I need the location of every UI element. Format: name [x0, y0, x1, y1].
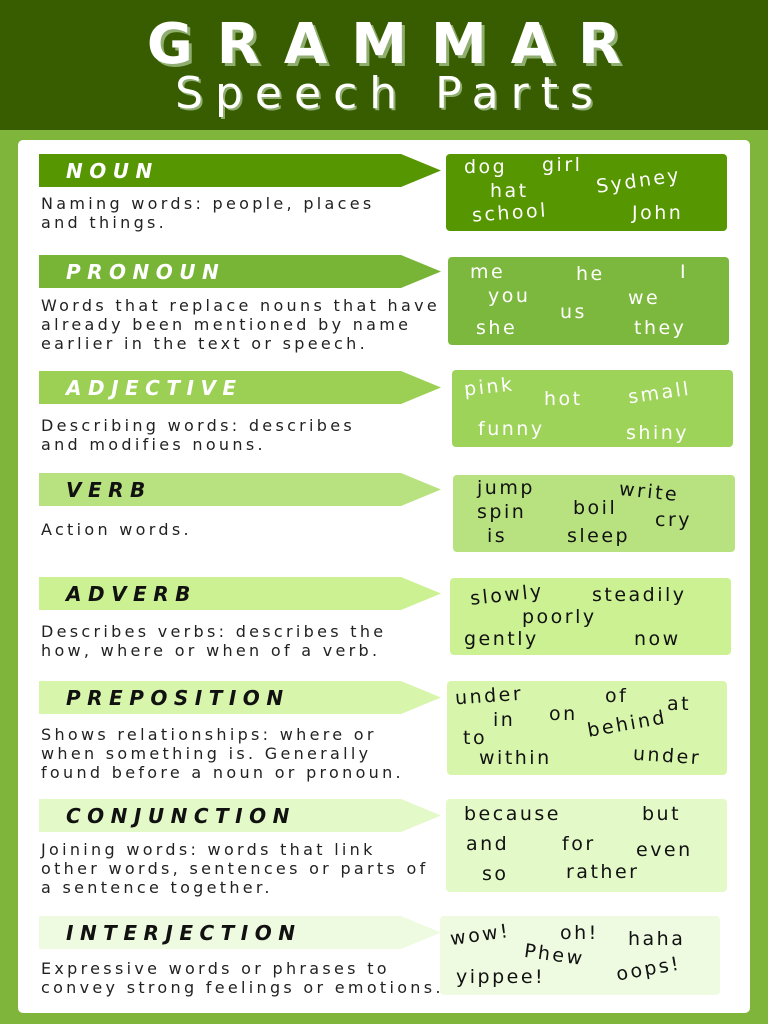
banner: adverb: ADVERB: [66, 582, 197, 606]
box: adverb examples: slowly: [469, 580, 545, 610]
box: interjection examples: wow!: [449, 920, 512, 950]
text: conjunction description: Joining words: words that link: [41, 840, 376, 859]
text: conjunction description: [40, 840, 428, 897]
box: interjection examples: haha: [628, 928, 685, 950]
box: pronoun examples: [448, 257, 729, 345]
banner: preposition: PREPOSITION: [66, 686, 290, 710]
box: verb examples: write: [618, 478, 680, 506]
box: adverb examples: poorly: [522, 606, 597, 628]
banner: noun: NOUN: [66, 159, 159, 183]
box: adverb examples: steadily: [592, 584, 687, 606]
text: preposition description: when something is. Generally: [41, 744, 371, 763]
box: conjunction examples: [446, 799, 727, 892]
text: adverb description: Describes verbs: describes the: [41, 622, 386, 641]
text: noun description: [41, 194, 375, 232]
box: adverb examples: [450, 578, 731, 655]
box: conjunction examples: so: [482, 863, 509, 885]
box: verb examples: cry: [655, 509, 692, 531]
text: interjection description: [41, 959, 444, 997]
box: adjective examples: hot: [544, 388, 583, 410]
box: preposition examples: at: [667, 693, 691, 715]
text: preposition description: Shows relationships: where or: [41, 725, 377, 744]
box: noun examples: John: [632, 202, 683, 224]
banner: conjunction: CONJUNCTION: [66, 804, 296, 828]
box: adverb examples: now: [634, 628, 681, 650]
box: noun examples: girl: [542, 154, 582, 176]
box: pronoun examples: we: [628, 287, 660, 309]
box: adverb examples: gently: [464, 628, 539, 650]
box: noun examples: [446, 154, 727, 231]
text: pronoun description: Words that replace nouns that have: [41, 296, 440, 315]
box: preposition examples: in: [493, 709, 515, 731]
box: verb examples: [453, 475, 735, 552]
banner: adverb: [39, 577, 441, 610]
banner: interjection: INTERJECTION: [66, 921, 302, 945]
box: preposition examples: on: [549, 703, 578, 725]
box: preposition examples: [447, 681, 727, 775]
banner: noun: [39, 154, 441, 187]
text: adverb description: [41, 622, 386, 660]
box: interjection examples: oops!: [615, 952, 683, 986]
box: adjective examples: funny: [478, 418, 545, 440]
box: adjective examples: pink: [463, 373, 515, 401]
banner: adjective: ADJECTIVE: [66, 376, 243, 400]
title: GRAMMAR: [147, 12, 645, 77]
box: adjective examples: shiny: [626, 422, 689, 444]
box: verb examples: spin: [477, 501, 526, 523]
box: pronoun examples: me: [470, 261, 505, 283]
text: interjection description: convey strong feelings or emotions.: [41, 978, 444, 997]
banner: pronoun: [39, 255, 441, 288]
text: preposition description: found before a noun or pronoun.: [41, 763, 404, 782]
box: noun examples: hat: [490, 180, 529, 202]
subtitle: Speech Parts: [175, 68, 605, 119]
banner: adjective: [39, 371, 441, 404]
text: adjective description: and modifies nouns.: [41, 435, 266, 454]
box: pronoun examples: you: [488, 285, 530, 307]
text: pronoun description: [41, 296, 440, 353]
header: [0, 0, 768, 130]
text: interjection description: Expressive words or phrases to: [41, 959, 390, 978]
text: pronoun description: earlier in the text or speech.: [41, 334, 368, 353]
text: noun description: and things.: [41, 213, 167, 232]
box: pronoun examples: he: [576, 263, 605, 285]
box: interjection examples: [440, 916, 720, 995]
box: pronoun examples: she: [476, 317, 517, 339]
banner: conjunction: [39, 799, 441, 832]
box: pronoun examples: I: [680, 261, 688, 283]
text: conjunction description: a sentence together.: [41, 878, 273, 897]
box: preposition examples: under: [454, 683, 524, 709]
box: pronoun examples: us: [560, 301, 587, 323]
box: noun examples: dog: [464, 156, 507, 178]
box: adjective examples: [452, 370, 733, 447]
text: preposition description: [41, 725, 404, 782]
box: conjunction examples: for: [562, 833, 596, 855]
text: adjective description: [41, 416, 355, 454]
box: preposition examples: within: [479, 747, 552, 769]
box: preposition examples: to: [463, 727, 487, 749]
banner: pronoun: PRONOUN: [66, 260, 225, 284]
box: noun examples: Sydney: [595, 164, 682, 198]
box: preposition examples: of: [605, 685, 628, 707]
box: conjunction examples: but: [642, 803, 681, 825]
box: interjection examples: oh!: [560, 922, 599, 944]
text: adjective description: Describing words: describes: [41, 416, 355, 435]
banner: verb: VERB: [66, 478, 152, 502]
box: conjunction examples: because: [464, 803, 561, 825]
text: verb description: Action words.: [41, 520, 192, 539]
box: noun examples: school: [471, 199, 549, 227]
box: interjection examples: yippee!: [456, 966, 545, 988]
banner: verb: [39, 473, 441, 506]
box: preposition examples: behind: [586, 706, 668, 742]
box: conjunction examples: rather: [566, 861, 639, 883]
box: verb examples: jump: [477, 477, 535, 499]
box: preposition examples: under: [632, 743, 702, 769]
box: adjective examples: small: [627, 378, 692, 408]
box: verb examples: is: [487, 525, 507, 547]
box: verb examples: sleep: [567, 525, 630, 547]
text: conjunction description: other words, sentences or parts of: [41, 859, 428, 878]
box: conjunction examples: and: [466, 833, 509, 855]
banner: preposition: [39, 681, 441, 714]
box: pronoun examples: they: [634, 317, 686, 339]
text: pronoun description: already been mentioned by name: [41, 315, 411, 334]
text: noun description: Naming words: people, places: [41, 194, 375, 213]
box: interjection examples: Phew: [523, 940, 586, 970]
banner: interjection: [39, 916, 440, 949]
text: adverb description: how, where or when of a verb.: [41, 641, 380, 660]
box: verb examples: boil: [573, 497, 617, 519]
box: conjunction examples: even: [636, 839, 693, 861]
